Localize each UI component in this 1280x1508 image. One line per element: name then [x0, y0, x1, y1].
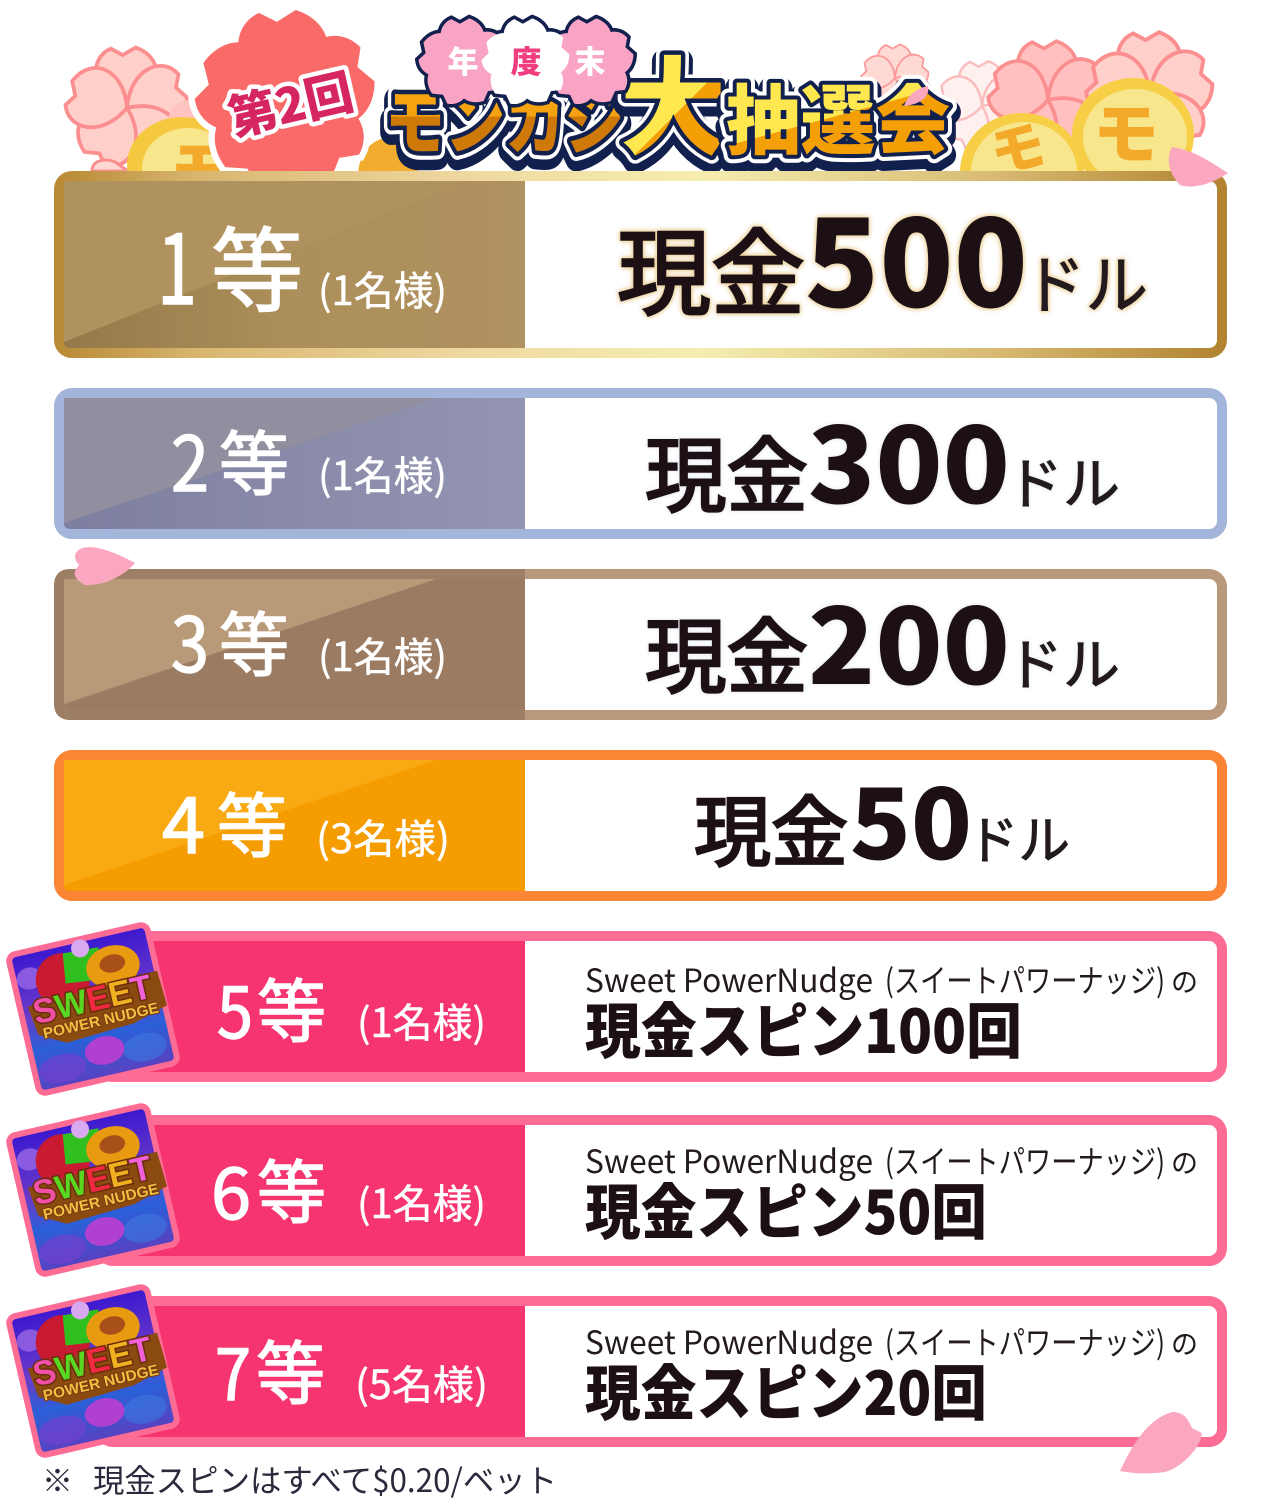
rank label [215, 1318, 488, 1421]
rank label [157, 193, 447, 332]
logo text: 大 [620, 23, 726, 177]
rank label [171, 403, 447, 513]
game thumbnail: SWEET [29, 968, 156, 1032]
年度末 blossoms [415, 18, 638, 110]
icon: pink blossom [983, 41, 1113, 165]
prize: cash 50 dollars: 50 [850, 748, 972, 887]
prize: cash 500 dollars: ドル [1023, 235, 1148, 327]
icon: center coin [358, 138, 418, 214]
rank label: 等 [257, 1137, 326, 1237]
prize: spins 20: 現金スピン20回 [585, 1346, 987, 1433]
logo text: モンカジ [385, 64, 625, 169]
panel: 2nd prize [59, 382, 1222, 534]
prize: cash 500 dollars: 500 [805, 168, 1028, 342]
icon: far right blossom [1080, 32, 1219, 165]
game thumbnail: SWEET [29, 1149, 156, 1213]
logo text: 抽選会 [726, 66, 950, 176]
prize: spins 100: 現金スピン100回 [585, 984, 1022, 1071]
rank label: 等 [256, 1318, 325, 1418]
game thumbnail [8, 1104, 180, 1275]
icon: left small petals [92, 160, 128, 171]
icon: petal left [75, 547, 135, 585]
prize: cash 300 dollars: 現金 [645, 410, 808, 529]
prize: cash 50 dollars: ドル [967, 799, 1070, 874]
icon: petal bottom right [1120, 1412, 1202, 1473]
rank label: 3 [171, 584, 209, 694]
logo text: モンカジ [385, 64, 625, 169]
rank label: (1名様) [318, 625, 447, 683]
prize: cash 300 dollars: ドル [1006, 440, 1120, 521]
prize: cash 500 dollars: 現金 [617, 199, 805, 335]
logo text: 抽選会 [726, 60, 950, 170]
panel: 1st prize [59, 168, 1222, 353]
panel: 7th prize [8, 1285, 1222, 1456]
prize: cash 300 dollars [645, 382, 1120, 533]
rank label [171, 584, 447, 694]
rank label: (3名様) [316, 807, 450, 865]
rank label: 等 [219, 409, 289, 510]
rank label: 4 [162, 765, 205, 875]
badge: 第2回 [184, 7, 388, 203]
prize: cash 500 dollars [617, 168, 1148, 342]
rank label: 等 [219, 590, 289, 691]
prize: cash 50 dollars [694, 748, 1070, 887]
logo text [385, 23, 950, 183]
panel: 3rd prize [59, 563, 1222, 715]
rank label [211, 1137, 486, 1240]
logo text: 大 [620, 23, 726, 177]
game thumbnail: POWER NUDGE [42, 1361, 160, 1405]
prize: spins 100: の [1171, 961, 1198, 1000]
rank label: (1名様) [318, 259, 447, 317]
rank label: 2 [171, 403, 209, 513]
rank label: 等 [217, 771, 287, 872]
年度末 blossoms: 末 [574, 37, 606, 82]
frame [59, 176, 1222, 353]
header: cherry blossoms and coins [60, 32, 1219, 231]
prize: cash 200 dollars: 現金 [645, 591, 808, 710]
frame [59, 574, 1222, 715]
年度末 blossoms: 年 [448, 37, 478, 82]
badge text: 第2回 [221, 53, 359, 149]
rank label: 7 [215, 1320, 251, 1421]
rank label: (1名様) [357, 991, 486, 1049]
rank label: 1 [157, 193, 197, 332]
label background [100, 941, 525, 1072]
logo text: 抽選会 [726, 60, 950, 170]
rank label: (1名様) [318, 444, 447, 502]
prize: cash 300 dollars: 300 [808, 382, 1010, 533]
footnote: ※ [42, 1456, 73, 1501]
label background [64, 398, 525, 529]
prize: spins 50: の [1171, 1142, 1198, 1181]
icon: left coin: モ [170, 120, 232, 210]
prize: spins 50: Sweet PowerNudge [585, 1137, 873, 1183]
frame [59, 755, 1222, 896]
icon: right coin back: モ [1093, 81, 1159, 177]
panel: 6th prize [8, 1104, 1222, 1275]
rank label: (1名様) [357, 1172, 486, 1230]
panel: 5th prize [8, 923, 1222, 1094]
footnote: 現金スピンはすべて$0.20/ベット [93, 1456, 557, 1502]
icon: white blossom [932, 61, 1031, 156]
prize: cash 200 dollars: ドル [1006, 621, 1120, 702]
prize: cash 200 dollars [645, 563, 1120, 714]
label background [64, 760, 525, 891]
game thumbnail: SWEET [29, 1330, 156, 1394]
game thumbnail: POWER NUDGE [42, 999, 160, 1043]
prize: spins 20: Sweet PowerNudge [585, 1318, 873, 1364]
prize: spins 100 [585, 956, 1198, 1071]
prize: spins 20: の [1171, 1323, 1198, 1362]
panel: 4th prize [59, 748, 1222, 896]
left border [59, 574, 525, 715]
label background [100, 1125, 525, 1256]
icon: red blossom [184, 7, 388, 203]
rank label [217, 956, 486, 1059]
rank label: 6 [211, 1139, 251, 1240]
prize: spins 50: 現金スピン50回 [585, 1165, 987, 1252]
prize: spins 20: (スイートパワーナッジ) [885, 1318, 1165, 1364]
game thumbnail: POWER NUDGE [42, 1180, 160, 1224]
prize: spins 100: Sweet PowerNudge [585, 956, 873, 1002]
icon: petal on logo [904, 86, 928, 106]
icon: right coin front: モ [980, 100, 1053, 190]
rank label: 等 [257, 956, 326, 1056]
frame [100, 936, 1222, 1077]
prize: cash 200 dollars: 200 [808, 563, 1010, 714]
icon: pale blossom behind coin [168, 100, 212, 144]
frame [100, 1301, 1222, 1442]
title logo [385, 18, 950, 183]
label background [100, 1306, 525, 1437]
prize: spins 50 [585, 1137, 1198, 1252]
prize: cash 50 dollars: 現金 [694, 772, 848, 883]
icon: left blossom [60, 48, 194, 175]
logo text: 大 [620, 29, 726, 183]
rank label [162, 765, 450, 875]
prize: spins 100: (スイートパワーナッジ) [885, 956, 1165, 1002]
icon: right coin front [960, 100, 1084, 231]
icon: right blossom small [858, 44, 932, 115]
frame [59, 393, 1222, 534]
年度末 blossoms: 度 [510, 37, 542, 82]
game thumbnail [8, 1285, 180, 1456]
prize: spins 50: (スイートパワーナッジ) [885, 1137, 1165, 1183]
label background [64, 579, 525, 710]
icon: petal top right [1169, 147, 1228, 187]
label background [64, 181, 525, 348]
rank label: (5名様) [355, 1353, 488, 1411]
logo text: モンカジ [385, 70, 625, 175]
icon: left coin [127, 117, 237, 213]
rank label: 5 [217, 958, 253, 1059]
rank label: 等 [211, 198, 303, 331]
prize: spins 20 [585, 1318, 1198, 1433]
frame [100, 1120, 1222, 1261]
game thumbnail [8, 923, 180, 1094]
icon: right coin back [1072, 78, 1194, 192]
